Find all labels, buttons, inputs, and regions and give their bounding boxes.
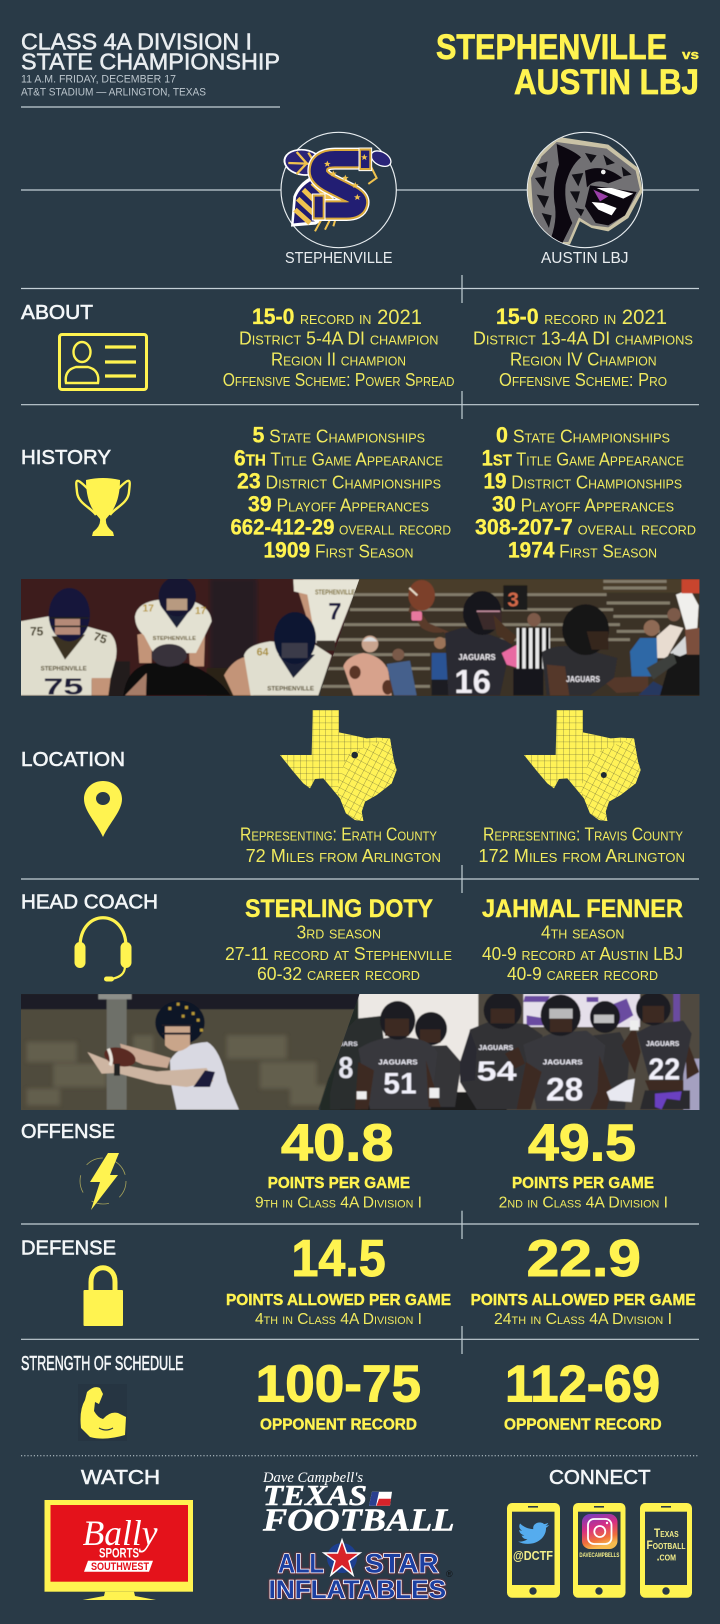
title: class 4A division I: CLASS 4A DIVISION I	[21, 28, 252, 54]
team name: Stephenville: STEPHENVILLE	[285, 250, 392, 267]
stat: Austin LBJ defense: POINTS ALLOWED PER GAME	[471, 1292, 696, 1309]
logo: All Star Inflatables: ®	[446, 1569, 453, 1579]
icon: padlock	[84, 1268, 123, 1326]
photo: Austin LBJ team entrance: JARS	[339, 1041, 358, 1048]
photo: Austin LBJ quarterback: 16	[454, 664, 491, 701]
location: Stephenville: Representing: Erath County	[240, 825, 437, 845]
photo: Stephenville linemen: STEPHENVILLE	[267, 686, 314, 693]
stat: Stephenville offense: 40.8	[281, 1115, 394, 1173]
history: Austin LBJ	[475, 423, 696, 563]
photo: Stephenville linemen: 7	[328, 599, 342, 626]
QB background player 17	[137, 631, 205, 666]
player 22	[622, 1025, 699, 1079]
coach: Jahmal Fenner: 40-9 career record	[507, 964, 658, 984]
stat: Stephenville defense: 14.5	[292, 1230, 386, 1288]
logo: All Star Inflatables: INFLATABLES	[269, 1576, 446, 1604]
photo: Stephenville linemen: 75	[92, 629, 109, 647]
photo: Austin LBJ quarterback: JAGUARS	[458, 652, 496, 662]
coach: Sterling Doty: 60-32 career record	[257, 964, 420, 984]
coach: Jahmal Fenner	[482, 895, 683, 984]
QB	[170, 1042, 239, 1110]
coach: Sterling Doty	[225, 895, 452, 984]
history: Stephenville: 6TH Title Game Appearance	[234, 446, 443, 471]
game venue: AT&T STADIUM — ARLINGTON, TEXAS	[21, 86, 206, 98]
map: Texas with Travis County	[521, 708, 647, 823]
coach: Jahmal Fenner: 40-9 record at Austin LBJ	[482, 944, 683, 964]
photo: Austin LBJ team entrance: 22	[648, 1052, 680, 1086]
icon: phone with TexasFootball.com: Football	[646, 1538, 686, 1552]
logo: Dave Campbell's Texas Football: TEXAS	[263, 1481, 367, 1512]
icon: tv with Bally Sports Southwest: SPORTS	[99, 1545, 139, 1561]
logo: Dave Campbell's Texas Football: Dave Campbell's	[262, 1470, 363, 1486]
matchup heading: STEPHENVILLE	[436, 27, 667, 67]
photo: Stephenville quarterback	[20, 992, 360, 1112]
team name: Austin LBJ: AUSTIN LBJ	[541, 250, 628, 267]
matchup heading: vs	[682, 47, 699, 62]
section heading: strength of schedule: STRENGTH OF SCHEDULE	[21, 1353, 184, 1375]
history: Austin LBJ: 30 Playoff Apperances	[492, 492, 674, 517]
stat: Austin LBJ defense: 24th in Class 4A Division I	[494, 1311, 672, 1328]
stat: Austin LBJ schedule: OPPONENT RECORD	[504, 1416, 662, 1433]
stat: Stephenville offense: POINTS PER GAME	[268, 1175, 410, 1192]
icon: lightning bolt	[80, 1153, 126, 1210]
section heading: head coach: HEAD COACH	[21, 891, 158, 914]
coach: Sterling Doty: 3rd season	[297, 923, 381, 943]
about: Austin LBJ	[473, 304, 693, 390]
photo: Stephenville linemen: 75	[43, 674, 83, 700]
location: Austin LBJ	[478, 825, 685, 866]
stat: Austin LBJ offense: 49.5	[528, 1115, 636, 1173]
photo: Austin LBJ team entrance: 8	[338, 1051, 353, 1085]
about: Stephenville: Region II champion	[271, 350, 406, 370]
coach: Sterling Doty: STERLING DOTY	[245, 895, 433, 923]
stat: Stephenville defense: 4th in Class 4A Division I	[255, 1311, 422, 1328]
section heading: defense: DEFENSE	[21, 1236, 116, 1259]
QB	[408, 605, 448, 634]
icon: phone with TexasFootball.com	[640, 1503, 692, 1598]
icon: tv with Bally Sports Southwest: SOUTHWEST	[91, 1561, 149, 1573]
logo: Stephenville hornet S	[281, 132, 396, 248]
stat: Stephenville offense: 9th in Class 4A Division I	[255, 1195, 422, 1212]
icon: flexed arm	[78, 1384, 127, 1441]
player 64	[224, 656, 253, 695]
heading: watch: WATCH	[81, 1466, 160, 1489]
center	[123, 663, 231, 695]
icon: phone with twitter: @DCTF	[513, 1548, 553, 1563]
history: Stephenville	[230, 423, 451, 563]
photo: Stephenville linemen: 75	[30, 624, 44, 638]
second player	[606, 676, 648, 693]
game time: 11 A.M. FRIDAY, DECEMBER 17	[21, 74, 176, 86]
coach: Jahmal Fenner: JAHMAL FENNER	[482, 895, 683, 923]
stat: Austin LBJ defense: 22.9	[527, 1230, 641, 1288]
icon: tv with Bally Sports Southwest	[44, 1500, 193, 1600]
location: Stephenville	[240, 825, 441, 866]
player 54	[460, 1021, 543, 1109]
coach: Sterling Doty: 27-11 record at Stephenville	[225, 944, 452, 964]
stat: Stephenville offense	[255, 1115, 422, 1212]
stat: Austin LBJ offense	[499, 1115, 668, 1212]
history: Austin LBJ: 1974 First Season	[508, 538, 657, 563]
history: Austin LBJ: 0 State Championships	[496, 423, 670, 448]
logo: Dave Campbell's Texas Football: FOOTBALL	[262, 1502, 454, 1538]
history: Stephenville: 1909 First Season	[264, 538, 414, 563]
section heading: history: HISTORY	[21, 446, 111, 469]
matchup heading: AUSTIN LBJ	[514, 62, 699, 102]
about: Austin LBJ: 15-0 record in 2021	[496, 304, 667, 329]
icon: headset	[74, 918, 132, 982]
player 8	[338, 1016, 384, 1110]
icon: phone with instagram	[573, 1503, 626, 1598]
header: game info	[21, 28, 280, 107]
history: Austin LBJ: 308-207-7 overall record	[475, 515, 696, 540]
icon: map pin	[84, 781, 122, 837]
photo: Stephenville linemen: STEPHENVILLE	[41, 666, 87, 673]
about: Austin LBJ: Region IV Champion	[510, 350, 657, 370]
stat: Austin LBJ offense: 2nd in Class 4A Division I	[499, 1195, 668, 1212]
stat: Austin LBJ schedule: 112-69	[505, 1356, 660, 1414]
player 75	[20, 616, 117, 695]
icon: phone with TexasFootball.com: Texas	[654, 1526, 679, 1540]
about: Austin LBJ: District 13-4A DI champions	[473, 329, 693, 349]
photo: Stephenville linemen: STEPHENVILLE	[153, 636, 196, 642]
photo: Austin LBJ team entrance: JAGUARS	[646, 1039, 679, 1048]
photo: Austin LBJ team entrance: JAGUARS	[478, 1043, 513, 1052]
coach: Jahmal Fenner: 4th season	[541, 923, 624, 943]
photo: Austin LBJ team entrance: 51	[383, 1068, 417, 1101]
stat: Stephenville schedule: 100-75	[256, 1356, 421, 1414]
logo: All Star Inflatables: STAR	[365, 1549, 438, 1579]
about: Stephenville: 15-0 record in 2021	[252, 304, 422, 329]
section heading: about: ABOUT	[21, 301, 93, 324]
photo: Stephenville linemen: 17	[195, 606, 207, 617]
location: Austin LBJ: Representing: Travis County	[483, 825, 683, 845]
crowd right	[644, 620, 660, 636]
logo: All Star Inflatables	[269, 1540, 453, 1604]
section heading: location: LOCATION	[21, 748, 125, 771]
about: Austin LBJ: Offensive Scheme: Pro	[499, 370, 667, 390]
icon: tv with Bally Sports Southwest: Bally	[83, 1513, 158, 1553]
section heading: offense: OFFENSE	[21, 1120, 115, 1143]
logo: Austin LBJ jaguar	[527, 132, 643, 248]
about: Stephenville: Offensive Scheme: Power Spread	[223, 370, 454, 390]
photo: Austin LBJ team entrance: JAGUARS	[378, 1058, 418, 1067]
stat: Stephenville defense: POINTS ALLOWED PER GAME	[226, 1292, 451, 1309]
referee	[527, 613, 541, 626]
player 7	[298, 592, 313, 624]
history: Stephenville: 662-412-29 overall record	[230, 515, 451, 540]
icon: phone with twitter	[507, 1503, 560, 1598]
photo: Stephenville linemen: 17	[143, 603, 154, 614]
history: Stephenville: 5 State Championships	[252, 423, 425, 448]
photo: Austin LBJ quarterback	[320, 578, 700, 701]
logo: Dave Campbell's Texas Football	[262, 1470, 454, 1538]
map: Texas with Erath County	[277, 708, 403, 823]
photo: Stephenville linemen	[20, 576, 360, 700]
photo strip 2: players	[20, 992, 700, 1112]
title: state championship: STATE CHAMPIONSHIP	[21, 48, 280, 74]
matchup heading	[436, 27, 699, 102]
heading: connect: CONNECT	[549, 1466, 651, 1489]
about: Stephenville: District 5-4A DI champion	[239, 329, 438, 349]
icon: trophy	[76, 478, 130, 536]
photo: Stephenville linemen: STEPHENVILLE	[315, 588, 355, 597]
photo: Austin LBJ quarterback: JAGUARS	[566, 674, 600, 684]
about: Stephenville	[223, 304, 454, 390]
history: Stephenville: 23 District Championships	[237, 469, 441, 494]
photo: Austin LBJ team entrance	[320, 992, 700, 1112]
icon: phone with instagram: DAVECAMPBELLS	[579, 1553, 619, 1559]
location: Stephenville: 72 Miles from Arlington	[246, 846, 441, 866]
stat: Stephenville defense	[226, 1230, 451, 1328]
history: Austin LBJ: 1ST Title Game Appearance	[482, 446, 684, 471]
back players	[432, 1044, 461, 1108]
photo: Stephenville linemen: 64	[257, 646, 269, 658]
icon: phone with TexasFootball.com: .com	[657, 1550, 676, 1564]
photo: Austin LBJ team entrance: 28	[546, 1070, 583, 1107]
history: Austin LBJ: 19 District Championships	[484, 469, 682, 494]
location: Austin LBJ: 172 Miles from Arlington	[478, 846, 685, 866]
logos row	[281, 132, 643, 248]
player 51	[358, 1037, 437, 1109]
history: Stephenville: 39 Playoff Apperances	[248, 492, 429, 517]
far right player	[318, 1060, 336, 1110]
stat: Austin LBJ defense	[471, 1230, 696, 1328]
photo strip 1: players	[20, 576, 700, 701]
stat: Austin LBJ offense: POINTS PER GAME	[512, 1175, 654, 1192]
logo: All Star Inflatables: ALL	[278, 1549, 324, 1579]
stat: Stephenville schedule: OPPONENT RECORD	[260, 1416, 417, 1433]
photo: Stephenville quarterback: 8	[338, 1053, 357, 1085]
photo: Austin LBJ quarterback: 3	[507, 588, 519, 611]
photo: Austin LBJ team entrance: 54	[477, 1056, 517, 1087]
photo: Austin LBJ team entrance: JAGUARS	[543, 1058, 583, 1067]
player 28	[523, 1031, 605, 1109]
icon: id card	[60, 334, 146, 390]
